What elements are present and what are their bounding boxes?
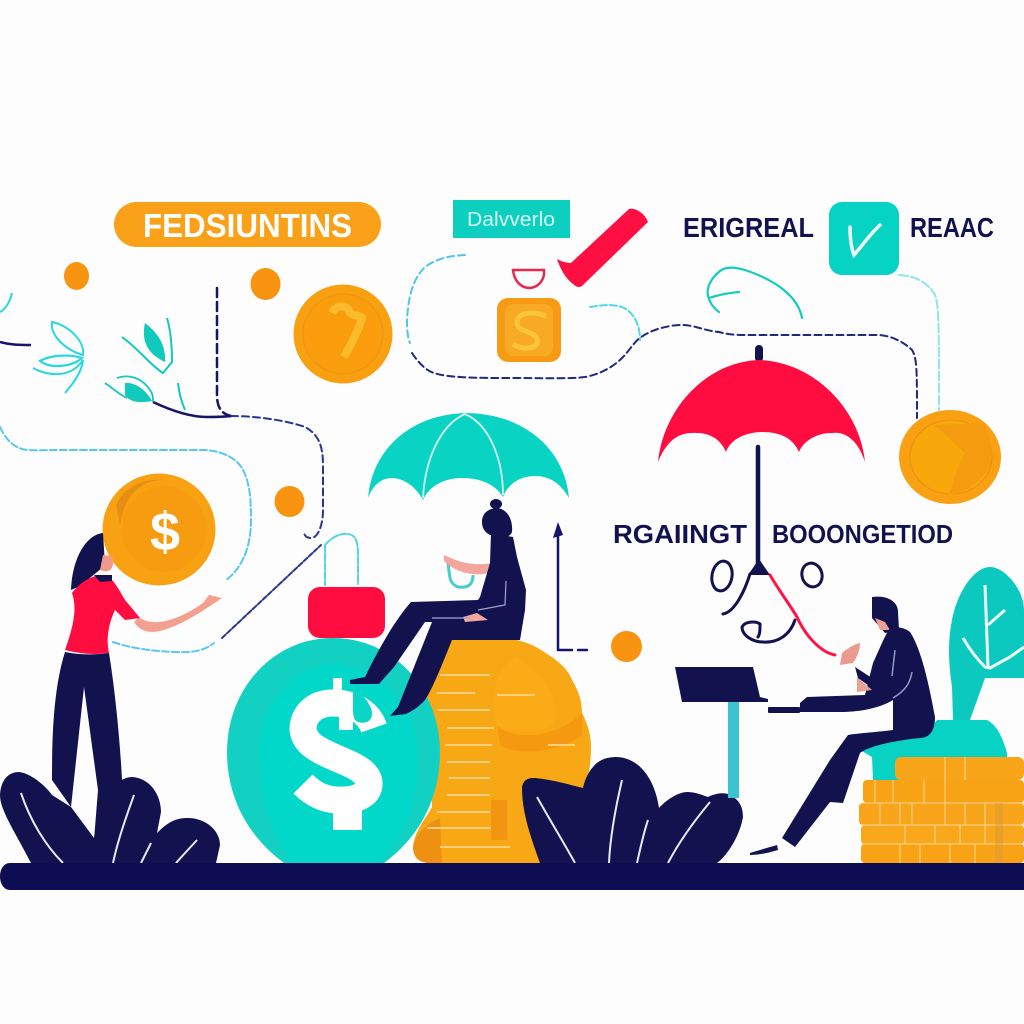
- label pill: heading: FEDSIUNTINS: [143, 207, 352, 244]
- arrowhead: [553, 522, 563, 538]
- coin with dollar sign: $: [150, 502, 180, 562]
- person: woman seated: [350, 499, 526, 716]
- branch with leaves: [0, 293, 231, 417]
- dollar sign on bag: [303, 678, 374, 830]
- umbrella handle cords: [710, 559, 835, 655]
- coin: right faceted: [899, 410, 1001, 504]
- orange dots: [64, 262, 642, 662]
- teal cushion: [860, 720, 1007, 780]
- icon: teal curved arrow: [708, 268, 802, 318]
- plant: centre bush: [522, 757, 743, 863]
- label pill: heading: [114, 202, 381, 247]
- icon: square coin: [497, 298, 561, 362]
- teal label box: [453, 200, 570, 238]
- connector paths: [0, 255, 939, 652]
- ground bar: [0, 863, 1024, 890]
- heading: lower centre label: RGAIINGT: [613, 519, 747, 549]
- teal label box: Dalvverlo: [467, 209, 555, 231]
- icon: teal check tile: [829, 202, 899, 275]
- money bag: [227, 587, 440, 863]
- teal umbrella: [368, 413, 569, 500]
- plant: left bush: [0, 772, 220, 863]
- heading: lower right label: BOOONGETIOD: [772, 519, 953, 549]
- person: man at laptop: [750, 597, 935, 855]
- heading: ERIGREAL: ERIGREAL: [683, 212, 814, 243]
- coin with seven: [294, 284, 392, 384]
- icon: small red cup: [513, 270, 544, 288]
- person: woman standing: [52, 533, 222, 840]
- red umbrella: [658, 345, 865, 565]
- coin stack right: [859, 757, 1024, 863]
- icon: red checkmark: [557, 209, 648, 287]
- heading: REAAC: REAAC: [910, 212, 994, 243]
- laptop on stand: [675, 667, 800, 798]
- coin stack centre: [413, 636, 591, 863]
- coin with dollar sign: [102, 474, 216, 586]
- teal tree: [949, 567, 1024, 720]
